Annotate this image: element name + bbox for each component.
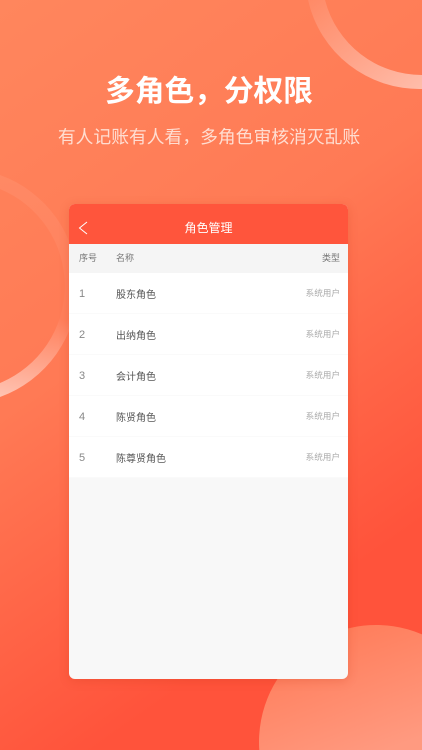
screen title: 角色管理 bbox=[184, 221, 232, 235]
row 5: 5 bbox=[79, 452, 85, 464]
row 2: 2 bbox=[79, 329, 85, 341]
row 2 bbox=[69, 314, 348, 355]
table header: 序号 bbox=[79, 253, 97, 263]
row 4: 陈贤角色 bbox=[116, 413, 156, 424]
row 5: 陈尊贤角色 bbox=[116, 454, 166, 465]
row 1 bbox=[69, 273, 348, 314]
table header: 名称 bbox=[116, 253, 134, 263]
row 3: 3 bbox=[79, 370, 85, 382]
row 3: 会计角色 bbox=[116, 372, 156, 383]
bottom right circle bbox=[259, 625, 422, 750]
row 4: 系统用户 bbox=[306, 411, 340, 421]
row 4: 4 bbox=[79, 411, 85, 423]
row 3: 系统用户 bbox=[306, 370, 340, 380]
row 1: 系统用户 bbox=[306, 288, 340, 298]
row 4 bbox=[69, 396, 348, 437]
table header: 类型 bbox=[322, 253, 340, 263]
header bar bbox=[69, 204, 348, 244]
row 1: 股东角色 bbox=[116, 290, 156, 301]
row 3 bbox=[69, 355, 348, 396]
top right ring bbox=[308, 0, 422, 89]
row 2: 出纳角色 bbox=[116, 331, 156, 342]
table header bbox=[69, 244, 348, 273]
panel: phone screen card bbox=[69, 204, 348, 679]
icon: back arrow bbox=[78, 222, 88, 234]
row 1: 1 bbox=[79, 288, 85, 300]
row 2: 系统用户 bbox=[306, 329, 340, 339]
subtitle: 有人记账有人看，多角色审核消灭乱账 bbox=[58, 127, 360, 147]
row 5: 系统用户 bbox=[306, 452, 340, 462]
left ring bbox=[0, 175, 78, 397]
title: 多角色，分权限 bbox=[105, 75, 313, 108]
row 5 bbox=[69, 437, 348, 478]
